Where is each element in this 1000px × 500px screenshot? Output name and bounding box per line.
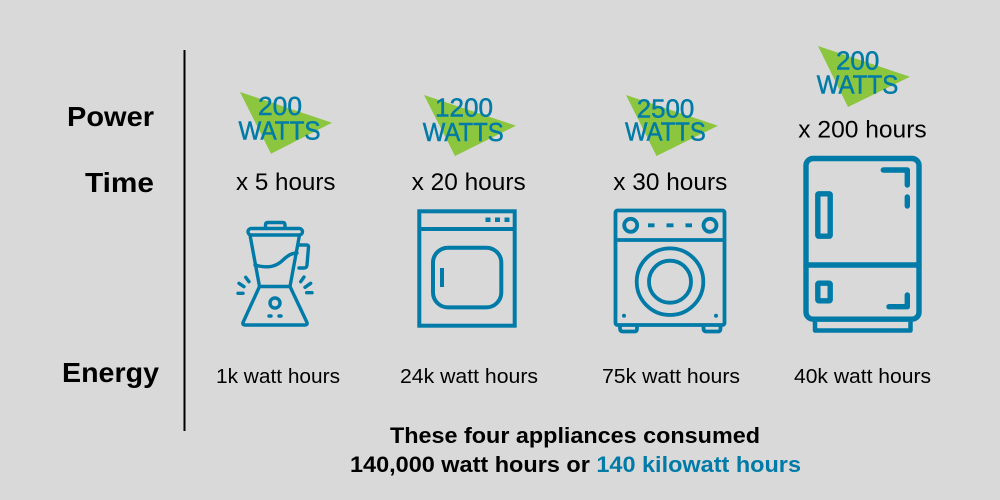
row label: Energy: Energy xyxy=(62,357,159,388)
power badge: dryer 1200 watts: 1200 xyxy=(435,93,493,123)
icon: washing machine xyxy=(616,210,724,332)
row label: Time: Time xyxy=(85,167,154,198)
power badge: dryer 1200 watts xyxy=(423,93,516,156)
power badge: blender 200 watts xyxy=(238,91,332,154)
time: dryer 20 hours: x 20 hours xyxy=(412,169,526,196)
time: fridge 200 hours: x 200 hours xyxy=(798,117,927,144)
conclusion text: These four appliances consumed xyxy=(390,423,760,448)
icon: blender xyxy=(238,222,312,325)
energy: blender: 1k watt hours xyxy=(216,366,340,388)
time: washer 30 hours: x 30 hours xyxy=(613,169,727,196)
power badge: washer 2500 watts: 2500 xyxy=(637,93,694,123)
conclusion text: 140,000 watt hours or 140 kilowatt hours xyxy=(350,452,801,477)
time: blender 5 hours: x 5 hours xyxy=(236,169,336,196)
icon: dryer xyxy=(419,211,515,326)
energy: fridge: 40k watt hours xyxy=(794,366,931,388)
power badge: dryer 1200 watts: WATTS xyxy=(423,117,504,147)
power badge: fridge 200 watts xyxy=(817,45,910,107)
power badge: blender 200 watts: WATTS xyxy=(238,115,320,145)
energy: washer: 75k watt hours xyxy=(602,366,740,388)
power badge: fridge 200 watts: 200 xyxy=(836,45,879,75)
conclusion text xyxy=(350,423,801,477)
icon: refrigerator xyxy=(806,158,919,330)
power badge: washer 2500 watts xyxy=(625,93,718,156)
energy: dryer: 24k watt hours xyxy=(400,366,538,388)
power badge: washer 2500 watts: WATTS xyxy=(625,117,706,147)
row label: Power: Power xyxy=(67,101,154,132)
power badge: blender 200 watts: 200 xyxy=(258,91,302,121)
power badge: fridge 200 watts: WATTS xyxy=(817,69,898,99)
